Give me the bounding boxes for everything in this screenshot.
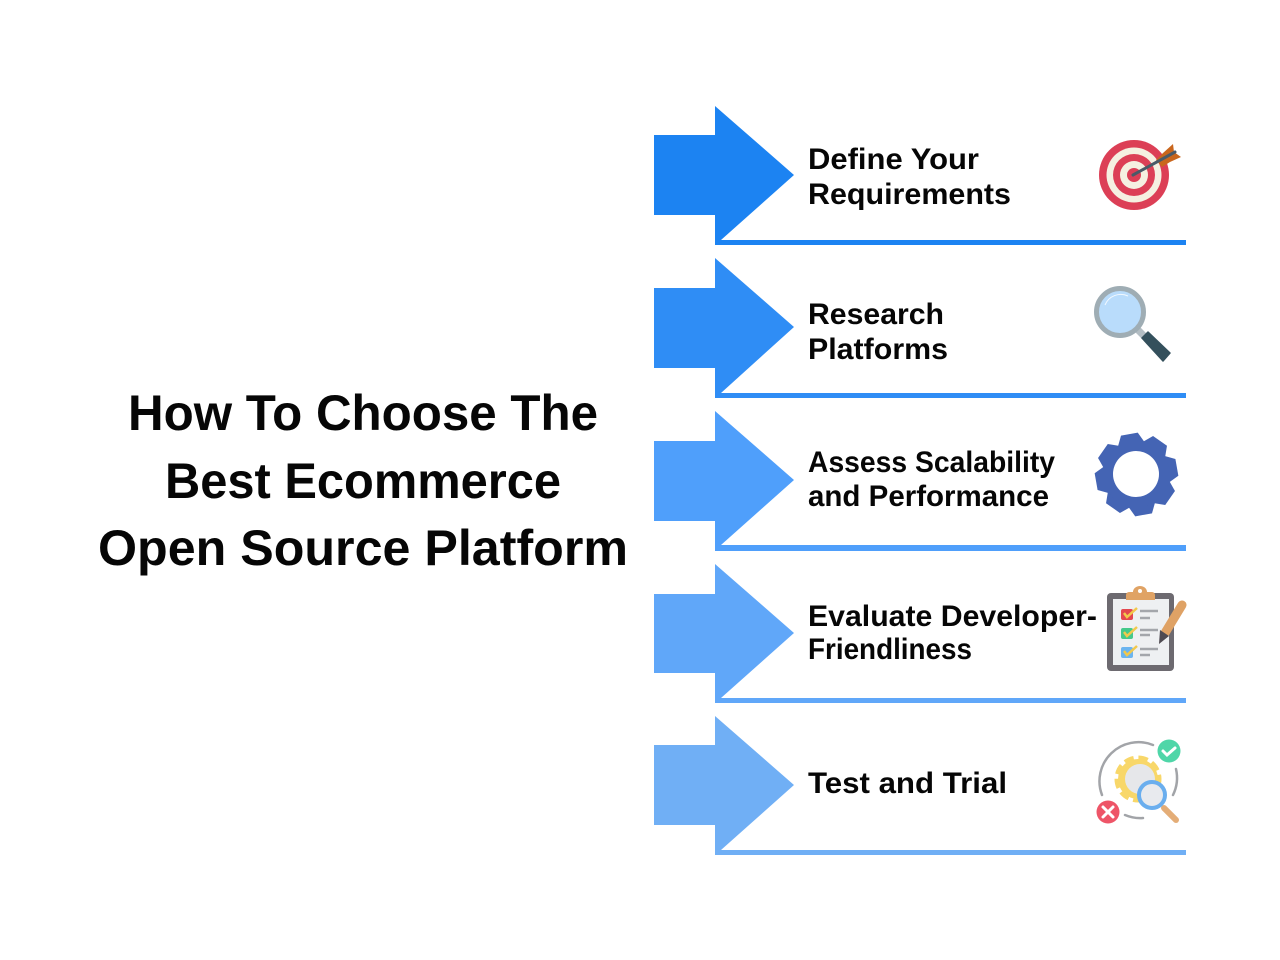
label 2: Platforms: [808, 333, 948, 366]
label 3: and Performance: [808, 480, 1049, 513]
arrow 3: [654, 411, 1186, 551]
label 4: Evaluate Developer-: [808, 600, 1097, 633]
label 2: Research: [808, 298, 944, 331]
icon: testing gear and magnifier: [1096, 740, 1180, 824]
step 4: evaluate developer-friendliness: [654, 564, 1186, 703]
label 1: Requirements: [808, 178, 1011, 211]
icon: magnifying glass: [1096, 288, 1170, 361]
step 5: test and trial: [654, 716, 1186, 855]
arrow 2: [654, 258, 1186, 398]
step 2: research platforms: [654, 258, 1186, 398]
arrow 1: [654, 106, 1186, 245]
label 3: Assess Scalability: [808, 446, 1055, 479]
icon: gear: [1094, 432, 1179, 517]
label 5: Test and Trial: [808, 767, 1007, 800]
arrow 5: [654, 716, 1186, 855]
arrow 4: [654, 564, 1186, 703]
label 1: [808, 143, 1011, 211]
title: Open Source Platform: [98, 520, 628, 576]
label 1: Define Your: [808, 143, 979, 176]
title: How To Choose The: [128, 385, 598, 441]
title: Best Ecommerce: [165, 453, 561, 509]
step 3: assess scalability and performance: [654, 411, 1186, 551]
label 2: [808, 298, 948, 366]
label 4: [808, 600, 1097, 666]
title: [98, 385, 628, 576]
label 4: Friendliness: [808, 633, 972, 666]
step 1: define your requirements: [654, 106, 1186, 245]
icon: checklist clipboard: [1107, 586, 1182, 671]
icon: target with arrow: [1099, 140, 1181, 210]
label 3: [808, 446, 1055, 513]
